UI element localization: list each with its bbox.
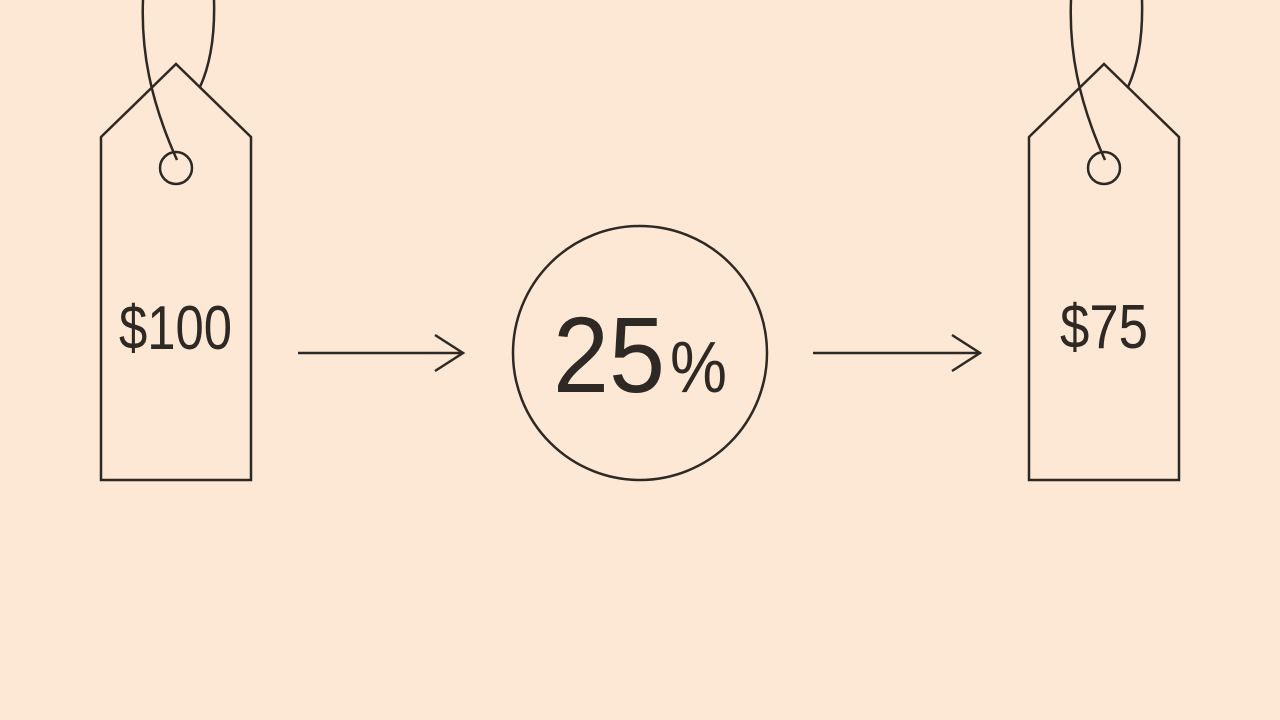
discount circle: 25%: % — [670, 328, 727, 408]
price tag: $75 — [1029, 0, 1179, 480]
label: $75: $75 — [1060, 293, 1148, 362]
label: $100: $100 — [119, 294, 232, 363]
arrow: right — [813, 335, 980, 371]
price tag: $100 — [101, 0, 251, 480]
arrow: left — [298, 335, 463, 371]
discount circle: 25% — [513, 226, 767, 480]
discount circle: 25%: 25 — [553, 294, 665, 415]
